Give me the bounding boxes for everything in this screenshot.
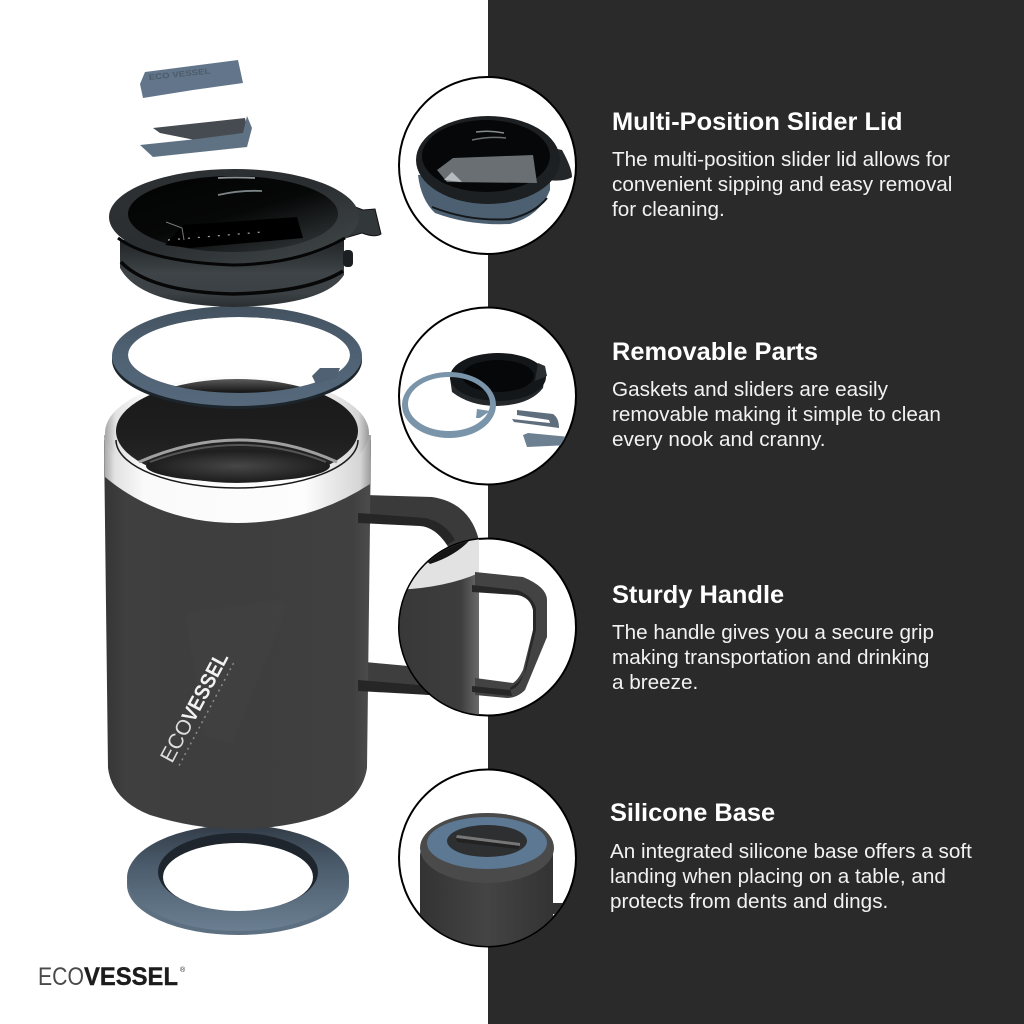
- slider top: [140, 60, 243, 98]
- closeup: assembled lid: [416, 116, 572, 224]
- lid opening: [165, 217, 303, 248]
- description: The handle gives you a secure grip: [612, 621, 934, 644]
- background: white left side: [0, 0, 488, 1024]
- brand logo: ®: [180, 966, 186, 974]
- background: dark right panel: [488, 0, 1024, 1024]
- description: for cleaning.: [612, 198, 725, 221]
- callout circle: silicone base: [399, 770, 576, 950]
- mug logo: ECO: [156, 715, 198, 766]
- heading: Silicone Base: [610, 799, 775, 827]
- mug body: [104, 440, 371, 829]
- lid: [109, 169, 381, 307]
- section: removable parts: [612, 338, 947, 451]
- slider top: ECO VESSEL: [148, 67, 211, 82]
- silicone base ring: [127, 825, 349, 935]
- brand logo: ECO: [38, 963, 84, 991]
- mug rim: [105, 376, 369, 490]
- heading: Removable Parts: [612, 338, 818, 366]
- closeup: mug underside: [420, 813, 570, 950]
- heading: Multi-Position Slider Lid: [612, 108, 903, 136]
- description: Gaskets and sliders are easily: [612, 378, 889, 401]
- closeup: mug handle: [400, 539, 547, 714]
- lid lower section: [120, 240, 344, 307]
- brand logo: VESSEL: [84, 963, 178, 991]
- description: landing when placing on a table, and: [610, 865, 946, 888]
- lid highlights: [218, 176, 255, 179]
- callout circle: removable parts: [399, 308, 576, 484]
- description: convenient sipping and easy removal: [612, 173, 952, 196]
- mug logo: [156, 648, 235, 767]
- description: protects from dents and dings.: [610, 890, 888, 913]
- brand logo: [38, 963, 186, 991]
- mug body reflection: [186, 600, 284, 745]
- callout circle: slider lid: [399, 77, 576, 254]
- slider bottom: [140, 116, 252, 157]
- description: removable making it simple to clean: [612, 403, 941, 426]
- description: An integrated silicone base offers a soft: [610, 840, 972, 863]
- description: a breeze.: [612, 671, 698, 694]
- lid tab: [345, 203, 381, 238]
- mug logo: VESSEL: [178, 649, 233, 726]
- lid bowl: [128, 176, 338, 252]
- section: silicone base: [610, 799, 978, 913]
- white steel band: [104, 435, 371, 523]
- exploded mug illustration: [104, 60, 480, 935]
- handle joints: [358, 513, 455, 695]
- description: The multi-position slider lid allows for: [612, 148, 950, 171]
- section: multi-position slider lid: [612, 108, 958, 221]
- closeup: lid and parts: [402, 353, 570, 447]
- description: every nook and cranny.: [612, 428, 826, 451]
- mug handle: [365, 495, 480, 695]
- heading: Sturdy Handle: [612, 581, 784, 609]
- callout circle: handle: [395, 530, 576, 720]
- lid rim: [109, 169, 359, 265]
- mug interior: [116, 379, 358, 488]
- gasket ring: [112, 306, 362, 409]
- lid knob: [343, 250, 353, 267]
- description: making transportation and drinking: [612, 646, 929, 669]
- section: sturdy handle: [612, 581, 940, 694]
